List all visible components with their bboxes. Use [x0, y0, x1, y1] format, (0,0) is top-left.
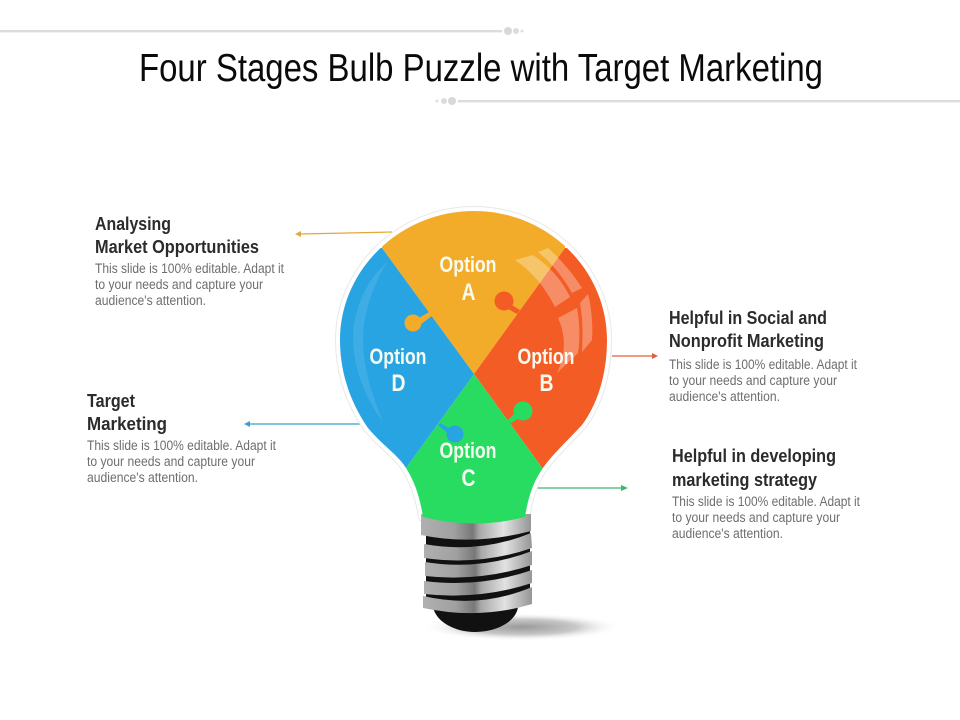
silver band 3	[425, 551, 532, 578]
label: Option A: Option	[440, 252, 496, 277]
text block: Helpful in developing marketing strategy: This slide is 100% editable. Adapt it	[672, 494, 860, 509]
text block: Helpful in developing marketing strategy: Helpful in developing	[672, 445, 836, 466]
piece A orange	[382, 200, 565, 374]
text block: Helpful in developing marketing strategy: marketing strategy	[672, 469, 818, 490]
silver collar	[421, 514, 531, 540]
silver band 4	[424, 570, 532, 596]
text block: Helpful in Social and Nonprofit Marketing: to your needs and capture your	[669, 373, 837, 388]
text block: Target Marketing: Target	[87, 390, 135, 411]
puzzle knob: red	[494, 292, 520, 314]
highlight window top	[515, 255, 570, 307]
text block: Analysing Market Opportunities	[95, 213, 284, 308]
text block: Target Marketing: Marketing	[87, 413, 167, 434]
arrow: to Target Marketing	[244, 421, 364, 427]
black core	[426, 525, 530, 632]
text block: Analysing Market Opportunities: to your needs and capture your	[95, 277, 263, 292]
text block: Target Marketing	[87, 390, 276, 485]
text block: Helpful in developing marketing strategy: to your needs and capture your	[672, 510, 840, 525]
highlight window lower	[557, 308, 579, 373]
label: Option C: Option	[440, 438, 496, 463]
label: Option D: Option	[370, 344, 426, 369]
label: Option C: C	[462, 465, 476, 492]
highlight window corner	[538, 248, 582, 293]
text block: Target Marketing: audience's attention.	[87, 470, 198, 485]
label: Option C	[440, 438, 496, 492]
text block: Analysing Market Opportunities: This slide is 100% editable. Adapt it	[95, 261, 284, 276]
text block: Helpful in developing marketing strategy	[672, 445, 860, 541]
silver band 5	[423, 587, 532, 613]
label: Option B: B	[540, 370, 554, 397]
piece D blue	[330, 248, 474, 468]
bulb outline	[340, 211, 607, 524]
label: Option D: D	[392, 370, 406, 397]
text block: Target Marketing: to your needs and capture your	[87, 454, 255, 469]
highlight on blue	[353, 262, 387, 422]
text block: Target Marketing: This slide is 100% editable. Adapt it	[87, 438, 276, 453]
bulb white rim	[340, 211, 607, 524]
text block: Helpful in Social and Nonprofit Marketing	[669, 307, 857, 404]
text block: Helpful in Social and Nonprofit Marketing: This slide is 100% editable. Adapt it	[669, 357, 857, 372]
title: Four Stages Bulb Puzzle with Target Marketing	[139, 47, 823, 90]
label: Option A	[440, 252, 496, 306]
text block: Analysing Market Opportunities: Market Opportunities	[95, 236, 259, 257]
text block: Analysing Market Opportunities: audience's attention.	[95, 293, 206, 308]
text block: Helpful in Social and Nonprofit Marketing: Nonprofit Marketing	[669, 330, 824, 351]
text block: Helpful in Social and Nonprofit Marketing: audience's attention.	[669, 389, 780, 404]
text block: Analysing Market Opportunities: Analysing	[95, 213, 171, 234]
piece C green	[406, 374, 543, 540]
glass highlights	[353, 248, 592, 422]
bulb puzzle pieces	[340, 211, 607, 524]
arrow: to developing marketing strategy	[537, 485, 628, 491]
highlight window right	[580, 294, 592, 352]
arrow: to Social and Nonprofit Marketing	[612, 353, 658, 359]
text block: Helpful in developing marketing strategy: audience's attention.	[672, 526, 783, 541]
lamp screw base	[421, 514, 532, 632]
lamp base shadow	[422, 613, 622, 641]
piece B red	[474, 248, 620, 469]
text block: Helpful in Social and Nonprofit Marketing: Helpful in Social and	[669, 307, 827, 328]
silver band 2	[424, 533, 532, 560]
label: Option A: A	[462, 279, 476, 306]
label: Option B: Option	[518, 344, 574, 369]
puzzle knob: green	[507, 402, 532, 424]
top header rule	[0, 27, 524, 35]
arrow: to Analysing Market Opportunities	[295, 231, 392, 237]
puzzle knob: orange	[404, 311, 433, 332]
label: Option B	[518, 344, 574, 397]
label: Option D	[370, 344, 426, 397]
bottom header rule	[436, 97, 960, 105]
puzzle knob: blue	[438, 423, 464, 442]
